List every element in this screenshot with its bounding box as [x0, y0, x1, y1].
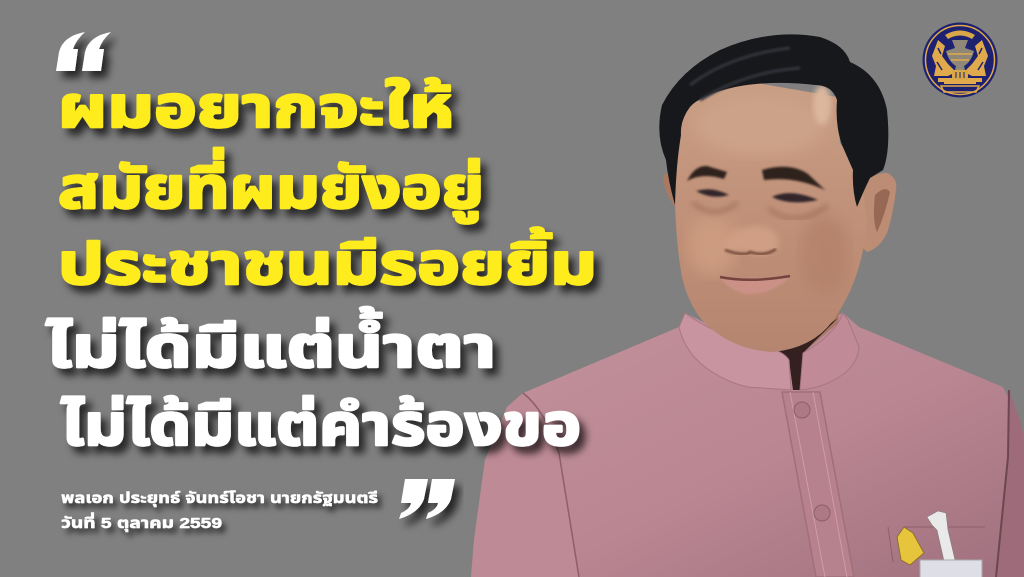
pin: [897, 527, 924, 565]
closing quotation mark: [399, 479, 455, 519]
button top: [794, 402, 810, 418]
quote line 1: ผมอยากจะให้: [58, 75, 454, 140]
seal urn: [946, 40, 974, 78]
eyes: [696, 189, 818, 202]
ears: [663, 172, 676, 207]
quote line 4: ไม่ได้มีแต่น้ำตา: [46, 306, 496, 380]
government seal logo: [922, 22, 998, 98]
jacket: [471, 313, 1024, 577]
hair: [659, 34, 888, 207]
eye bags: [692, 202, 828, 218]
seal base: [938, 78, 982, 84]
placket: [782, 392, 854, 577]
seal right lion: [964, 40, 988, 76]
collar: [679, 313, 791, 390]
opening quotation mark: [56, 32, 111, 71]
eyebrows: [687, 166, 825, 190]
portrait: man in pink jacket: [471, 34, 1024, 577]
face: [675, 80, 867, 352]
id badge: [920, 560, 982, 577]
quote line 5: ไม่ได้มีแต่คำร้องขอ: [61, 393, 581, 458]
id tag strip: [927, 511, 955, 561]
nose: [722, 226, 778, 255]
mouth: [720, 277, 790, 294]
pocket line: [888, 527, 985, 562]
quote line 3: ประชาชนมีรอยยิ้ม: [58, 226, 597, 297]
quote line 2: สมัยที่ผมยังอยู่: [58, 147, 484, 224]
button lower: [814, 505, 830, 521]
neck and dark V opening: [700, 300, 840, 390]
seal left lion: [932, 40, 956, 76]
attribution date: วันที่ 5 ตุลาคม 2559: [61, 512, 222, 532]
seal top ornament: [945, 30, 975, 39]
attribution name: พลเอก ประยุทธ์ จันทร์โอชา นายกรัฐมนตรี: [61, 490, 378, 507]
